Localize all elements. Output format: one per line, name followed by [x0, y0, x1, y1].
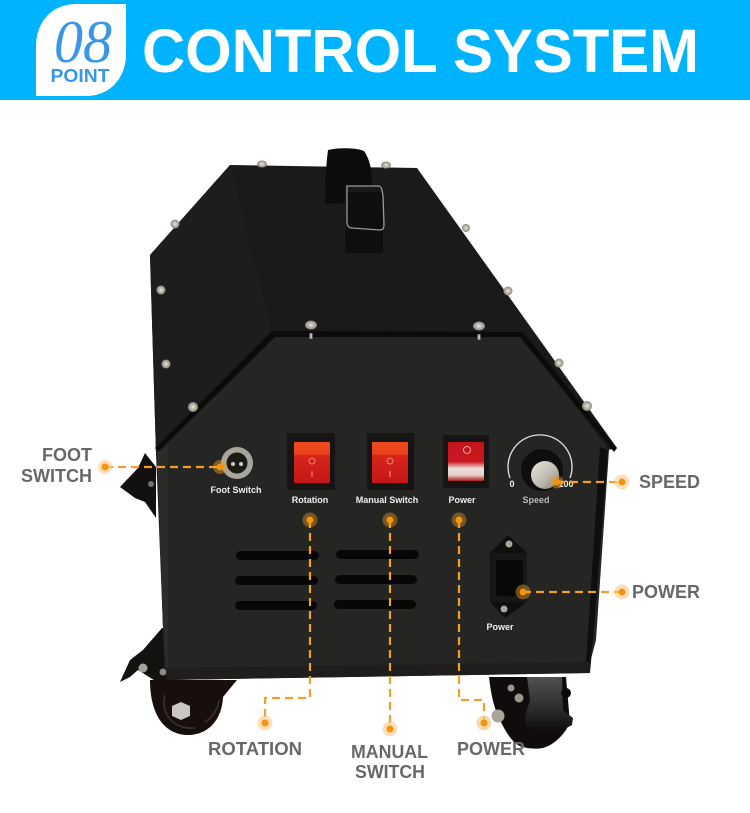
callout: power switch	[452, 512, 525, 759]
callout: manual switch: SWITCH	[355, 762, 425, 782]
callout: manual switch: MANUAL	[351, 742, 428, 762]
speed dial	[508, 435, 574, 505]
left caster wheel	[120, 628, 237, 735]
power socket: Power	[486, 622, 514, 632]
callout: rotation	[208, 512, 318, 759]
number badge	[36, 4, 126, 96]
power rocker switch	[443, 435, 489, 505]
foot switch connector: Foot Switch	[210, 485, 262, 495]
callout: speed	[550, 472, 700, 492]
manual rocker switch	[356, 433, 418, 505]
header banner	[0, 0, 750, 100]
left cover facet	[150, 165, 272, 453]
power socket	[486, 535, 527, 632]
callout: foot switch: SWITCH	[21, 466, 92, 486]
callout: power socket	[516, 582, 700, 602]
number badge: 08	[54, 9, 112, 75]
callout: foot switch: FOOT	[42, 445, 92, 465]
front panel lip	[155, 331, 617, 452]
cover screws	[156, 160, 592, 412]
speed dial: 0	[509, 479, 515, 489]
machine top cover	[150, 165, 617, 680]
callout: rotation: ROTATION	[208, 739, 302, 759]
carry handle	[325, 148, 384, 253]
power rocker switch: Power	[448, 495, 476, 505]
callout: manual switch	[351, 512, 428, 782]
number badge: POINT	[50, 66, 110, 86]
front panel	[157, 335, 609, 670]
manual rocker switch: Manual Switch	[356, 495, 418, 505]
foot switch connector	[210, 447, 262, 495]
panel bottom flange	[166, 662, 590, 680]
left side edge	[157, 446, 168, 670]
right caster wheel	[489, 677, 573, 749]
callout: speed: SPEED	[639, 472, 700, 492]
speed dial: 100	[558, 479, 574, 489]
title: CONTROL SYSTEM	[142, 17, 699, 85]
rotation rocker switch: Rotation	[292, 495, 328, 505]
callout: foot switch	[21, 445, 227, 486]
callout: power switch: POWER	[457, 739, 525, 759]
foot switch side clip	[120, 453, 156, 518]
machine photo	[120, 148, 617, 749]
right side edge	[586, 447, 608, 663]
rotation rocker switch	[287, 433, 335, 505]
ventilation slots	[235, 550, 419, 610]
speed dial: Speed	[522, 495, 550, 505]
callout: power socket: POWER	[632, 582, 700, 602]
